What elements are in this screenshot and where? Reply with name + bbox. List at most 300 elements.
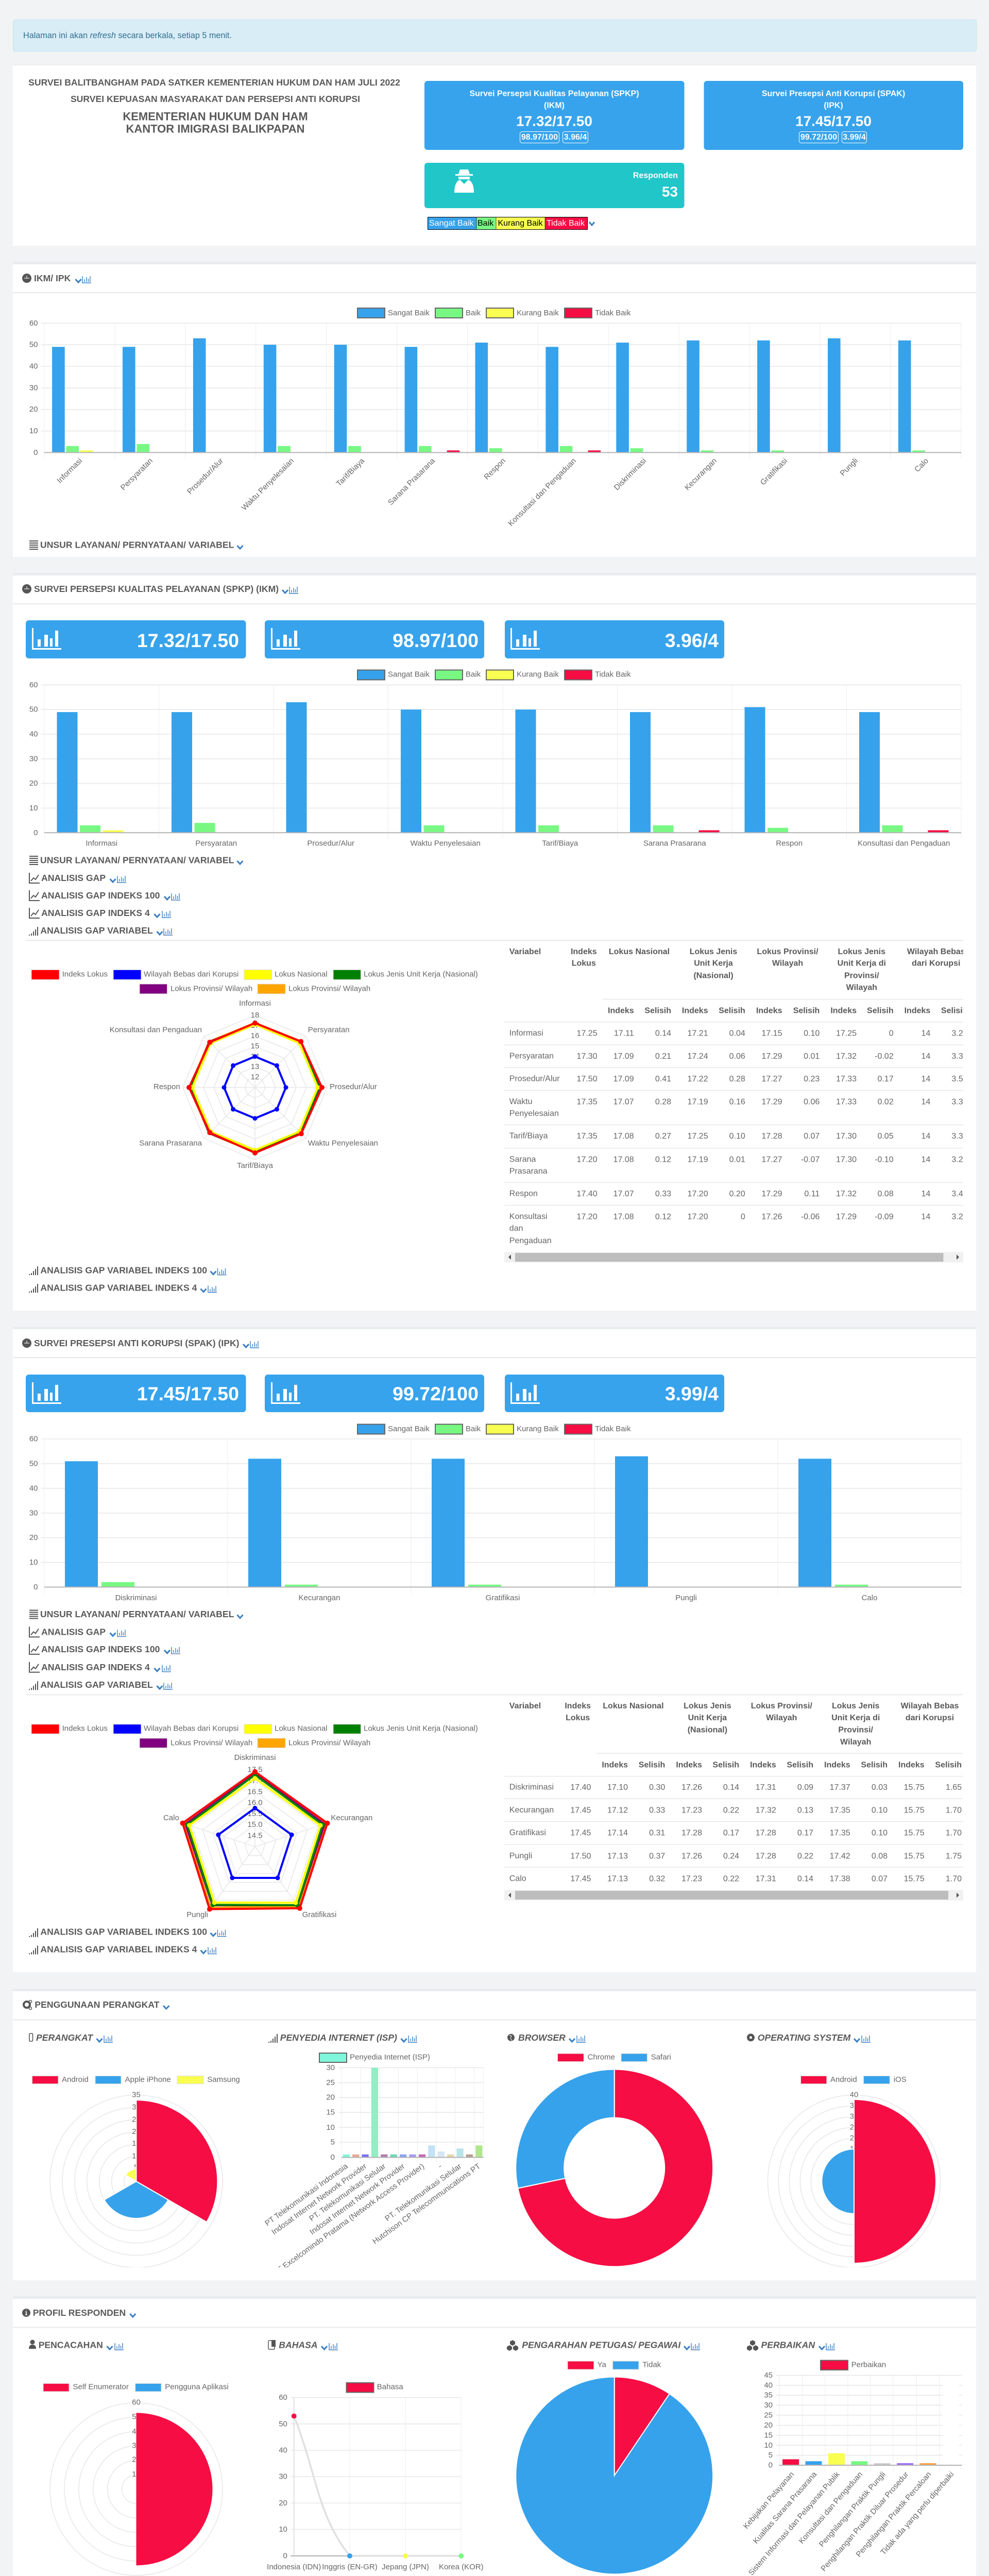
gap table: SPAK: 17.12 bbox=[607, 1806, 628, 1815]
gap table: SPAK: 17.50 bbox=[570, 1852, 591, 1860]
gap table: SPKP: 17.50 bbox=[577, 1075, 598, 1083]
gap table: SPAK: 17.28 bbox=[756, 1828, 776, 1837]
category labels: Tarif/Biaya bbox=[542, 839, 578, 848]
rating legend: Sangat Baik bbox=[429, 219, 474, 228]
gap table: SPKP: 17.08 bbox=[613, 1132, 634, 1141]
gap table: SPKP: Persyaratan bbox=[509, 1052, 554, 1060]
gap table: SPAK: 17.35 bbox=[830, 1828, 850, 1837]
rating legend: Kurang Baik bbox=[498, 219, 543, 228]
alert banner: Halaman ini akan refresh secara berkala, setiap 5 menit. bbox=[23, 31, 232, 40]
radar chart: SPAK bbox=[163, 1753, 372, 1919]
category labels: Penghilangan Praktik Diluar Prosedur bbox=[819, 2470, 910, 2573]
gap table: SPAK: Unit Kerja bbox=[688, 1714, 727, 1722]
bar chart: SPKP bbox=[29, 681, 961, 848]
polar chart: device: 20 bbox=[132, 2127, 141, 2136]
legend: Baik bbox=[466, 670, 481, 679]
axis labels: Waktu Penyelesaian bbox=[308, 1139, 378, 1148]
gap table: SPAK: Selisih bbox=[935, 1760, 962, 1769]
category labels: Prosedur/Alur bbox=[185, 456, 225, 496]
gap table: SPAK: 15.75 bbox=[904, 1828, 925, 1837]
polar chart: operating system: 25 bbox=[850, 2123, 858, 2132]
segment: Samsung bbox=[126, 2169, 136, 2181]
gap table: SPKP: Selisih bbox=[793, 1006, 820, 1015]
gap table: SPKP: 0.06 bbox=[729, 1052, 745, 1060]
stat boxes bbox=[26, 1375, 724, 1412]
legend: Chrome bbox=[588, 2053, 615, 2062]
legend bbox=[357, 670, 631, 680]
gap table: SPKP: Selisih bbox=[719, 1006, 745, 1015]
gap table: SPKP: 0.06 bbox=[804, 1097, 820, 1106]
axis labels bbox=[110, 999, 378, 1170]
bar chart: all variables: 20 bbox=[29, 405, 38, 414]
gap table: SPKP: 0.17 bbox=[877, 1075, 894, 1083]
bar chart: improvements: 45 bbox=[764, 2371, 773, 2380]
gap table: SPAK: 1.65 bbox=[946, 1783, 962, 1792]
respondent card: Responden bbox=[633, 171, 678, 180]
subheadings: analysis: ANALISIS GAP INDEKS 100 bbox=[41, 1644, 160, 1654]
legend: Apple iPhone bbox=[125, 2075, 171, 2084]
bar chart: all variables: 10 bbox=[29, 427, 38, 435]
gap table: SPKP: 3.20 bbox=[951, 1212, 968, 1221]
gap table: SPAK: 0.07 bbox=[872, 1874, 888, 1883]
polar chart: operating system: 15 bbox=[850, 2144, 858, 2154]
category labels bbox=[55, 456, 930, 528]
category labels: Persyaratan bbox=[119, 456, 155, 492]
subheadings: analysis: ANALISIS GAP INDEKS 4 bbox=[41, 908, 150, 918]
gap table: SPAK: 0.33 bbox=[649, 1806, 665, 1815]
bar chart: improvements: 30 bbox=[764, 2401, 773, 2410]
gap table: SPKP: Lokus bbox=[572, 959, 596, 968]
gap table: SPAK: Lokus Jenis bbox=[684, 1702, 731, 1710]
bar chart: all variables: 0 bbox=[33, 448, 38, 457]
polar chart: operating system: 30 bbox=[850, 2112, 858, 2121]
bars: Sangat Baik bbox=[52, 338, 911, 452]
gap table: SPKP: Unit Kerja di bbox=[838, 959, 886, 968]
bar chart: all variables bbox=[29, 319, 961, 528]
series: red bbox=[189, 1023, 322, 1153]
category labels: Informasi bbox=[55, 456, 84, 485]
category labels: Penghilangan Praktik Pungli bbox=[817, 2470, 888, 2549]
radar chart: SPAK: 16.5 bbox=[247, 1788, 263, 1796]
bar chart: all variables: 40 bbox=[29, 362, 38, 371]
gap table: SPAK: 0.24 bbox=[723, 1852, 739, 1860]
bar chart: improvements: 35 bbox=[764, 2391, 773, 2400]
gap table: SPKP: 0.11 bbox=[804, 1190, 820, 1198]
score card: SPAK bbox=[704, 81, 963, 150]
category labels: Kecurangan bbox=[683, 456, 719, 492]
gap table: SPKP: 0.12 bbox=[655, 1212, 671, 1221]
series: orange bbox=[190, 1023, 320, 1153]
gap table: SPKP: 14 bbox=[922, 1075, 930, 1083]
legend bbox=[801, 2075, 907, 2084]
subheadings: analysis bbox=[29, 1609, 243, 1690]
radar chart: SPAK: 17.5 bbox=[247, 1765, 263, 1774]
polar chart: device: 35 bbox=[132, 2091, 141, 2099]
legend: Android bbox=[62, 2075, 89, 2084]
radar legend: Lokus Nasional bbox=[275, 1724, 328, 1733]
survey title: KEMENTERIAN HUKUM DAN HAM bbox=[123, 110, 308, 123]
polar chart: device: 25 bbox=[132, 2115, 141, 2124]
polar chart: enumeration: 60 bbox=[132, 2398, 141, 2407]
axis labels: Persyaratan bbox=[308, 1025, 350, 1035]
line chart: language: 20 bbox=[279, 2499, 287, 2507]
series: yellow bbox=[190, 1778, 320, 1903]
gap table: SPAK: 17.28 bbox=[681, 1828, 702, 1837]
series: orange bbox=[184, 1772, 325, 1908]
bars: Kurang Baik bbox=[103, 831, 124, 833]
gap table: SPAK: Wilayah bbox=[766, 1714, 797, 1722]
legend: Sangat Baik bbox=[388, 1425, 430, 1433]
stat boxes: 99.72/100 bbox=[393, 1383, 479, 1404]
segment: Self Enumerator bbox=[136, 2413, 213, 2565]
gap table: SPKP: 17.33 bbox=[836, 1075, 857, 1083]
gap table: SPAK: 0.17 bbox=[723, 1828, 739, 1837]
heading: respondent profile: PROFIL RESPONDEN bbox=[33, 2308, 126, 2318]
radar legend: Lokus Nasional bbox=[275, 970, 328, 979]
table scrollbar bbox=[504, 1252, 963, 1262]
bar chart: SPAK: 20 bbox=[29, 1533, 38, 1542]
polar chart: enumeration: 40 bbox=[132, 2427, 141, 2436]
legend bbox=[357, 308, 631, 318]
heading: improvements: PERBAIKAN bbox=[761, 2340, 815, 2350]
gap table: SPAK: 15.75 bbox=[904, 1874, 925, 1883]
gap table: SPKP: 17.32 bbox=[836, 1190, 857, 1198]
gap table: SPKP: Indeks bbox=[608, 1006, 634, 1015]
category labels: Sistem Informasi dan Pelayanan Publik bbox=[747, 2470, 842, 2576]
gap table: SPAK: 1.75 bbox=[946, 1852, 962, 1860]
panel: respondent profile bbox=[13, 2296, 976, 2576]
gap table: SPAK: 1.70 bbox=[946, 1828, 962, 1837]
gap table: SPKP: 14 bbox=[922, 1052, 930, 1060]
panel: IKM/IPK bbox=[13, 262, 976, 557]
radar legend: Lokus Jenis Unit Kerja (Nasional) bbox=[364, 970, 478, 979]
survey title: SURVEI KEPUASAN MASYARAKAT DAN PERSEPSI ANTI KORUPSI bbox=[71, 94, 360, 104]
gap table: SPKP: 17.07 bbox=[613, 1097, 634, 1106]
gap table: SPKP: 0.33 bbox=[655, 1190, 671, 1198]
gap table: SPKP: 17.29 bbox=[761, 1097, 782, 1106]
gap table: SPAK: 17.28 bbox=[756, 1852, 776, 1860]
bars: Sangat Baik bbox=[57, 702, 880, 833]
polar chart: enumeration: 20 bbox=[132, 2455, 141, 2464]
series: green bbox=[187, 1775, 322, 1905]
gap table: SPKP: 3.30 bbox=[951, 1052, 968, 1060]
legend bbox=[32, 2075, 240, 2084]
radar chart: SPKP: 12 bbox=[251, 1073, 259, 1081]
gap table: SPKP: 17.15 bbox=[761, 1029, 782, 1038]
gap table: SPKP: -0.07 bbox=[801, 1155, 820, 1164]
category labels: Prosedur/Alur bbox=[307, 839, 354, 848]
survey title: KANTOR IMIGRASI BALIKPAPAN bbox=[126, 123, 305, 135]
legend: Kurang Baik bbox=[517, 309, 559, 317]
gap table: SPKP: 0.10 bbox=[804, 1029, 820, 1038]
bar chart: improvements: 25 bbox=[764, 2411, 773, 2419]
gap table: SPAK: 15.75 bbox=[904, 1783, 925, 1792]
gap table: SPAK: Indeks bbox=[602, 1760, 628, 1769]
radar legend bbox=[31, 1724, 478, 1748]
gap table: SPKP: 3.20 bbox=[951, 1155, 968, 1164]
gap table: SPKP: 17.25 bbox=[688, 1132, 708, 1141]
gap table: SPKP: 17.08 bbox=[613, 1212, 634, 1221]
legend: Kurang Baik bbox=[517, 670, 559, 679]
gap table: SPKP: 0.10 bbox=[729, 1132, 745, 1141]
radar legend: Indeks Lokus bbox=[62, 1724, 108, 1733]
segment: Chrome bbox=[518, 2070, 713, 2266]
heading: device bbox=[29, 2032, 113, 2043]
axis labels: Calo bbox=[163, 1814, 179, 1822]
score card: SPKP: Survei Persepsi Kualitas Pelayanan (SPKP) bbox=[469, 90, 639, 98]
gap table: SPKP: 17.21 bbox=[688, 1029, 708, 1038]
axis labels: Respon bbox=[154, 1082, 180, 1091]
bar chart: SPAK: 0 bbox=[33, 1583, 38, 1591]
gap table: SPKP: 0.20 bbox=[729, 1190, 745, 1198]
gap table: SPAK: 17.26 bbox=[681, 1783, 702, 1792]
gap table: SPKP: 17.09 bbox=[613, 1075, 634, 1083]
radar chart: SPAK: 14.5 bbox=[247, 1831, 263, 1840]
gap table: SPAK: 17.13 bbox=[607, 1874, 628, 1883]
bars: Kurang Baik bbox=[80, 450, 93, 452]
category labels: Konsultasi dan Pengaduan bbox=[858, 839, 950, 848]
radar chart: SPAK: 17.0 bbox=[247, 1776, 263, 1785]
gap table: SPAK: 1.70 bbox=[946, 1874, 962, 1883]
gap table: SPKP: 0.23 bbox=[804, 1075, 820, 1083]
legend: Tidak Baik bbox=[595, 309, 631, 317]
category labels: Indosat Internet Network Provider bbox=[308, 2162, 406, 2236]
score card: SPAK: 99.72/100 bbox=[800, 133, 837, 142]
legend: Sangat Baik bbox=[388, 309, 430, 317]
gap table: SPKP: 17.29 bbox=[836, 1212, 857, 1221]
category labels: Diskriminasi bbox=[612, 456, 648, 492]
bar chart: SPAK: 50 bbox=[29, 1459, 38, 1468]
gap table: SPKP: 0.16 bbox=[729, 1097, 745, 1106]
gap table: SPKP: 17.26 bbox=[761, 1212, 782, 1221]
subheadings: variable gap bbox=[29, 1265, 227, 1293]
gap table: SPAK: Unit Kerja di bbox=[831, 1714, 880, 1722]
category labels: Pungli bbox=[839, 456, 860, 478]
gap table: SPKP: 17.20 bbox=[688, 1212, 708, 1221]
gap table: SPKP: 0.41 bbox=[655, 1075, 671, 1083]
bar chart: all variables: 30 bbox=[29, 383, 38, 392]
heading: IKM/IPK bbox=[22, 273, 91, 283]
gap table: SPKP: 17.22 bbox=[688, 1075, 708, 1083]
respondent card bbox=[424, 163, 684, 208]
gap table: SPKP: Indeks bbox=[756, 1006, 782, 1015]
gap table: SPKP: 17.40 bbox=[577, 1190, 598, 1198]
score card: SPKP: (IKM) bbox=[544, 101, 565, 110]
category labels bbox=[265, 2163, 479, 2267]
gap table: SPAK: Lokus Nasional bbox=[603, 1702, 664, 1710]
doughnut chart: browser bbox=[507, 2032, 713, 2266]
bar chart: SPKP: 10 bbox=[29, 804, 38, 812]
gap table: SPKP: 17.29 bbox=[761, 1052, 782, 1060]
gap table: SPKP: Lokus Provinsi/ bbox=[757, 947, 819, 956]
gap table: SPKP: Provinsi/ bbox=[844, 972, 879, 980]
gap table: SPKP: 3.35 bbox=[951, 1097, 968, 1106]
radar chart: SPKP: 17 bbox=[251, 1021, 259, 1030]
category labels: Korea (KOR) bbox=[439, 2563, 484, 2571]
bar chart: SPKP: 50 bbox=[29, 705, 38, 714]
category labels: PT. Telekomunikasi Selular bbox=[308, 2162, 387, 2223]
gap table: SPAK: Indeks bbox=[898, 1760, 925, 1769]
bars: Baik bbox=[66, 444, 925, 452]
category labels: Tarif/Biaya bbox=[334, 456, 366, 488]
gap table: SPKP: Tarif/Biaya bbox=[509, 1132, 548, 1141]
category labels bbox=[86, 839, 950, 848]
gap table: SPKP: 17.29 bbox=[761, 1190, 782, 1198]
gap table: SPAK: (Nasional) bbox=[688, 1725, 727, 1734]
gap table: SPKP: 14 bbox=[922, 1132, 930, 1141]
radar legend: Lokus Provinsi/ Wilayah bbox=[170, 1738, 252, 1748]
line chart: language: 60 bbox=[279, 2393, 287, 2402]
category labels: Tidak ada yang perlu diperbaiki bbox=[879, 2470, 956, 2556]
gap table: SPAK: 17.42 bbox=[830, 1852, 850, 1860]
bar chart: improvements bbox=[742, 2340, 962, 2576]
bar chart: SPAK bbox=[29, 1434, 961, 1602]
stat boxes: 17.45/17.50 bbox=[137, 1383, 239, 1404]
subheadings: analysis: ANALISIS GAP VARIABEL bbox=[40, 1680, 153, 1690]
survey title: SURVEI BALITBANGHAM PADA SATKER KEMENTERIAN HUKUM DAN HAM JULI 2022 bbox=[28, 77, 400, 88]
gap table: SPKP: Waktu bbox=[509, 1097, 533, 1106]
gap table: SPKP: 0.07 bbox=[804, 1132, 820, 1141]
series: purple bbox=[185, 1774, 325, 1905]
bar chart: ISP: 15 bbox=[326, 2108, 335, 2117]
heading: language bbox=[268, 2340, 338, 2350]
gap table: SPKP: 17.25 bbox=[836, 1029, 857, 1038]
gap table: SPAK: 0.22 bbox=[723, 1874, 739, 1883]
gap table: SPKP: 0.21 bbox=[655, 1052, 671, 1060]
gap table: SPAK: 0.08 bbox=[872, 1852, 888, 1860]
legend: Tidak bbox=[642, 2361, 661, 2369]
gap table: SPAK: 0.30 bbox=[649, 1783, 665, 1792]
stat boxes: 3.96/4 bbox=[665, 630, 719, 651]
bar chart: SPKP: 20 bbox=[29, 779, 38, 788]
gap table: SPKP: Wilayah bbox=[772, 959, 803, 968]
gap table: SPAK: Lokus Provinsi/ bbox=[751, 1702, 812, 1710]
axis labels: Diskriminasi bbox=[234, 1753, 276, 1762]
subheadings: analysis: ANALISIS GAP INDEKS 4 bbox=[41, 1662, 150, 1672]
polar chart: enumeration: 10 bbox=[132, 2470, 141, 2479]
gap table: SPKP: 0.01 bbox=[729, 1155, 745, 1164]
gap table: SPKP: 17.20 bbox=[577, 1155, 598, 1164]
gap table: SPAK: 17.31 bbox=[756, 1874, 776, 1883]
gap table: SPKP: Selisih bbox=[867, 1006, 894, 1015]
gap table: SPKP: dari Korupsi bbox=[912, 959, 960, 968]
gap table: SPKP: 0 bbox=[741, 1212, 745, 1221]
category labels bbox=[267, 2563, 484, 2571]
subheadings: analysis: UNSUR LAYANAN/ PERNYATAAN/ VARIABEL bbox=[40, 855, 234, 866]
rating legend bbox=[428, 217, 594, 230]
bars: Tidak Baik bbox=[447, 450, 601, 452]
gap table: SPKP: 17.24 bbox=[688, 1052, 708, 1060]
axis labels bbox=[163, 1753, 372, 1919]
panel: device usage bbox=[13, 1989, 976, 2280]
category labels: Jepang (JPN) bbox=[382, 2563, 429, 2571]
bar chart: improvements: 15 bbox=[764, 2431, 773, 2439]
gap table: SPKP: 17.25 bbox=[577, 1029, 598, 1038]
legend: Baik bbox=[466, 1425, 481, 1433]
bars: improvement values bbox=[782, 2453, 936, 2465]
line chart: language: 50 bbox=[279, 2419, 287, 2428]
heading: SPAK: SURVEI PRESEPSI ANTI KORUPSI (SPAK) (IPK) bbox=[34, 1338, 240, 1348]
gap table: SPKP: Selisih bbox=[644, 1006, 671, 1015]
bars: Tidak Baik bbox=[698, 831, 949, 833]
bars: Baik bbox=[80, 823, 902, 833]
gap table: SPKP: 17.30 bbox=[577, 1052, 598, 1060]
gap table: SPKP: Lokus Nasional bbox=[609, 947, 670, 956]
gap table: SPKP: 0.02 bbox=[877, 1097, 894, 1106]
polar chart: device: 30 bbox=[132, 2103, 141, 2111]
subheadings: variable gap: ANALISIS GAP VARIABEL INDEKS 4 bbox=[40, 1283, 197, 1293]
segment: Safari bbox=[516, 2070, 615, 2188]
gap table: SPKP: dan bbox=[509, 1224, 523, 1233]
bar chart: improvements: 10 bbox=[764, 2441, 773, 2450]
panel: survey header bbox=[13, 64, 976, 246]
polar chart: enumeration: 30 bbox=[132, 2441, 141, 2450]
legend: iOS bbox=[894, 2075, 907, 2084]
axis labels: Kecurangan bbox=[331, 1814, 372, 1822]
series: green bbox=[191, 1023, 319, 1152]
bar chart: ISP: 10 bbox=[326, 2123, 335, 2132]
gap table: SPKP: (Nasional) bbox=[693, 972, 734, 980]
axis labels: Informasi bbox=[239, 999, 271, 1008]
gap table: SPKP: 17.20 bbox=[577, 1212, 598, 1221]
bar chart: SPAK: 10 bbox=[29, 1558, 38, 1567]
alert banner bbox=[13, 20, 977, 52]
axis labels: Tarif/Biaya bbox=[237, 1161, 274, 1170]
gap table: SPAK: Kecurangan bbox=[509, 1806, 554, 1815]
bar chart: improvements: 5 bbox=[769, 2451, 773, 2460]
heading: SPKP: SURVEI PERSEPSI KUALITAS PELAYANAN (SPKP) (IKM) bbox=[34, 584, 279, 594]
gap table: SPKP: Pengaduan bbox=[509, 1236, 552, 1245]
segment: iOS bbox=[822, 2149, 854, 2214]
gap table: SPKP: 17.19 bbox=[688, 1155, 708, 1164]
gap table: SPKP: 17.28 bbox=[761, 1132, 782, 1141]
subheadings: variable gap: ANALISIS GAP VARIABEL INDEKS 100 bbox=[40, 1265, 207, 1276]
gap table: SPKP: Prosedur/Alur bbox=[509, 1075, 560, 1083]
legend: Kurang Baik bbox=[517, 1425, 559, 1433]
polar chart: enumeration bbox=[29, 2340, 229, 2575]
gap table: SPKP: Konsultasi bbox=[509, 1212, 548, 1221]
gap table: SPKP: Wilayah Bebas bbox=[907, 947, 965, 956]
radar legend: Lokus Provinsi/ Wilayah bbox=[288, 1738, 370, 1748]
gap table: SPKP: 0.27 bbox=[655, 1132, 671, 1141]
gap table: SPKP: Selisih bbox=[941, 1006, 967, 1015]
gap table: SPKP: 3.50 bbox=[951, 1075, 968, 1083]
gap table: SPKP: Lokus Jenis bbox=[690, 947, 737, 956]
axis labels: Prosedur/Alur bbox=[330, 1082, 377, 1091]
heading: improvements bbox=[747, 2340, 835, 2351]
gap table: SPAK: 17.13 bbox=[607, 1852, 628, 1860]
polar chart: device: 15 bbox=[132, 2139, 141, 2148]
radar chart: SPAK: 15.0 bbox=[247, 1820, 263, 1829]
stat boxes bbox=[26, 620, 724, 658]
subheading: unsur layanan: UNSUR LAYANAN/ PERNYATAAN/ VARIABEL bbox=[40, 540, 234, 550]
axis labels: Sarana Prasarana bbox=[139, 1139, 202, 1148]
data points bbox=[292, 2414, 464, 2558]
gap table: SPKP: Indeks bbox=[682, 1006, 708, 1015]
rating legend: Tidak Baik bbox=[547, 219, 585, 228]
bar chart: ISP: 20 bbox=[326, 2093, 335, 2102]
gap table: SPAK: 0.22 bbox=[723, 1806, 739, 1815]
gap table: SPAK: 0.32 bbox=[649, 1874, 665, 1883]
gap table: SPKP: Prasarana bbox=[509, 1167, 548, 1176]
gap table: SPAK: Wilayah bbox=[840, 1738, 871, 1747]
gap table: SPAK: Provinsi/ bbox=[838, 1725, 874, 1734]
subheadings: analysis: ANALISIS GAP INDEKS 100 bbox=[41, 890, 160, 901]
gap table: SPKP: 3.35 bbox=[951, 1132, 968, 1141]
gap table: SPKP: 14 bbox=[922, 1190, 930, 1198]
subheadings: analysis: UNSUR LAYANAN/ PERNYATAAN/ VARIABEL bbox=[40, 1609, 234, 1619]
legend: Baik bbox=[466, 309, 481, 317]
